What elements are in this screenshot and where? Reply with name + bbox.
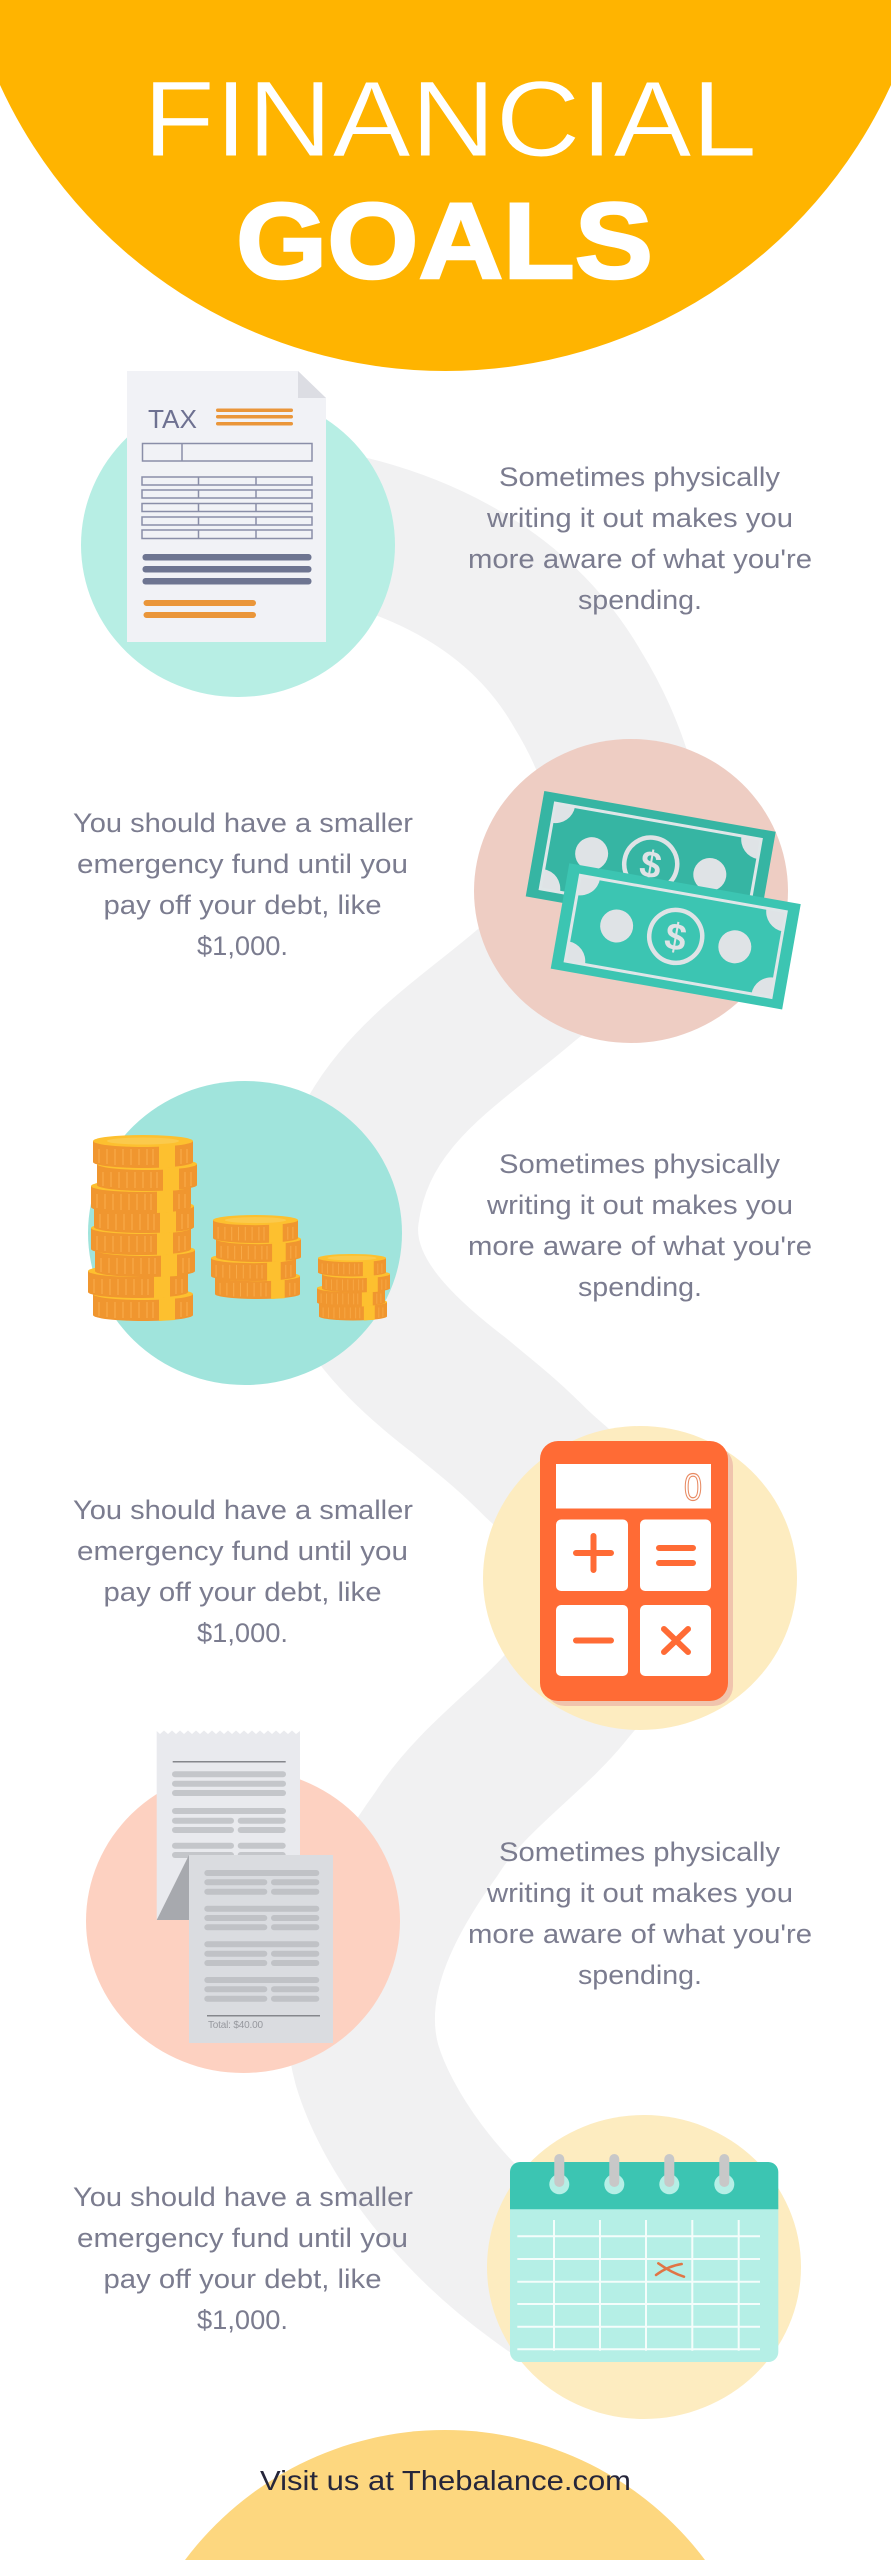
text block 1 xyxy=(468,462,812,615)
front banknote: $ xyxy=(661,915,690,960)
title xyxy=(143,58,757,301)
circle: receipts background xyxy=(86,1769,400,2073)
text block 1: more aware of what you're xyxy=(468,544,812,574)
icon: banknotes xyxy=(526,791,801,1009)
text block 2: $1,000. xyxy=(197,931,288,961)
back banknote: $ xyxy=(636,843,665,888)
text block 1: writing it out makes you xyxy=(486,503,793,533)
icon: calendar xyxy=(510,2154,778,2362)
text block 5 xyxy=(468,1837,812,1990)
text block 1: Sometimes physically xyxy=(499,462,781,492)
icon: tax form: TAX xyxy=(148,404,197,434)
text block 4 xyxy=(73,1495,413,1648)
text block 6: emergency fund until you xyxy=(77,2223,408,2253)
icon: calculator xyxy=(540,1441,733,1706)
circle: tax background xyxy=(81,393,395,697)
header semicircle xyxy=(0,0,891,371)
text block 2: pay off your debt, like xyxy=(104,890,382,920)
text block 4: emergency fund until you xyxy=(77,1536,408,1566)
text block 3: writing it out makes you xyxy=(486,1190,793,1220)
text block 5: writing it out makes you xyxy=(486,1878,793,1908)
text block 3: more aware of what you're xyxy=(468,1231,812,1261)
icon: receipts xyxy=(157,1730,333,2043)
text block 5: spending. xyxy=(578,1960,702,1990)
footer text: Visit us at Thebalance.com xyxy=(260,2465,631,2496)
text block 5: more aware of what you're xyxy=(468,1919,812,1949)
circle: calendar background xyxy=(487,2115,801,2419)
text block 6: You should have a smaller xyxy=(73,2182,413,2212)
circle: calculator background xyxy=(483,1426,797,1730)
text block 2: You should have a smaller xyxy=(73,808,413,838)
text block 4: $1,000. xyxy=(197,1618,288,1648)
icon: calculator: 0 xyxy=(684,1467,702,1509)
title: GOALS xyxy=(236,180,653,301)
text block 3 xyxy=(468,1149,812,1302)
winding grey path xyxy=(300,520,640,2330)
text block 6: pay off your debt, like xyxy=(104,2264,382,2294)
icon: tax form xyxy=(127,371,326,642)
circle: coins background xyxy=(88,1081,402,1385)
text block 2 xyxy=(73,808,413,961)
icon: coin stacks xyxy=(88,1135,390,1321)
text block 3: spending. xyxy=(578,1272,702,1302)
text block 4: pay off your debt, like xyxy=(104,1577,382,1607)
text block 3: Sometimes physically xyxy=(499,1149,781,1179)
title: FINANCIAL xyxy=(143,58,757,179)
text block 5: Sometimes physically xyxy=(499,1837,781,1867)
icon: receipts: Total: $40.00 xyxy=(208,2020,263,2031)
circle: money background xyxy=(474,739,788,1043)
text block 6 xyxy=(73,2182,413,2335)
text block 4: You should have a smaller xyxy=(73,1495,413,1525)
back banknote xyxy=(526,791,776,937)
text block 1: spending. xyxy=(578,585,702,615)
front banknote xyxy=(551,863,801,1009)
footer semicircle xyxy=(185,2430,705,2560)
text block 2: emergency fund until you xyxy=(77,849,408,879)
text block 6: $1,000. xyxy=(197,2305,288,2335)
